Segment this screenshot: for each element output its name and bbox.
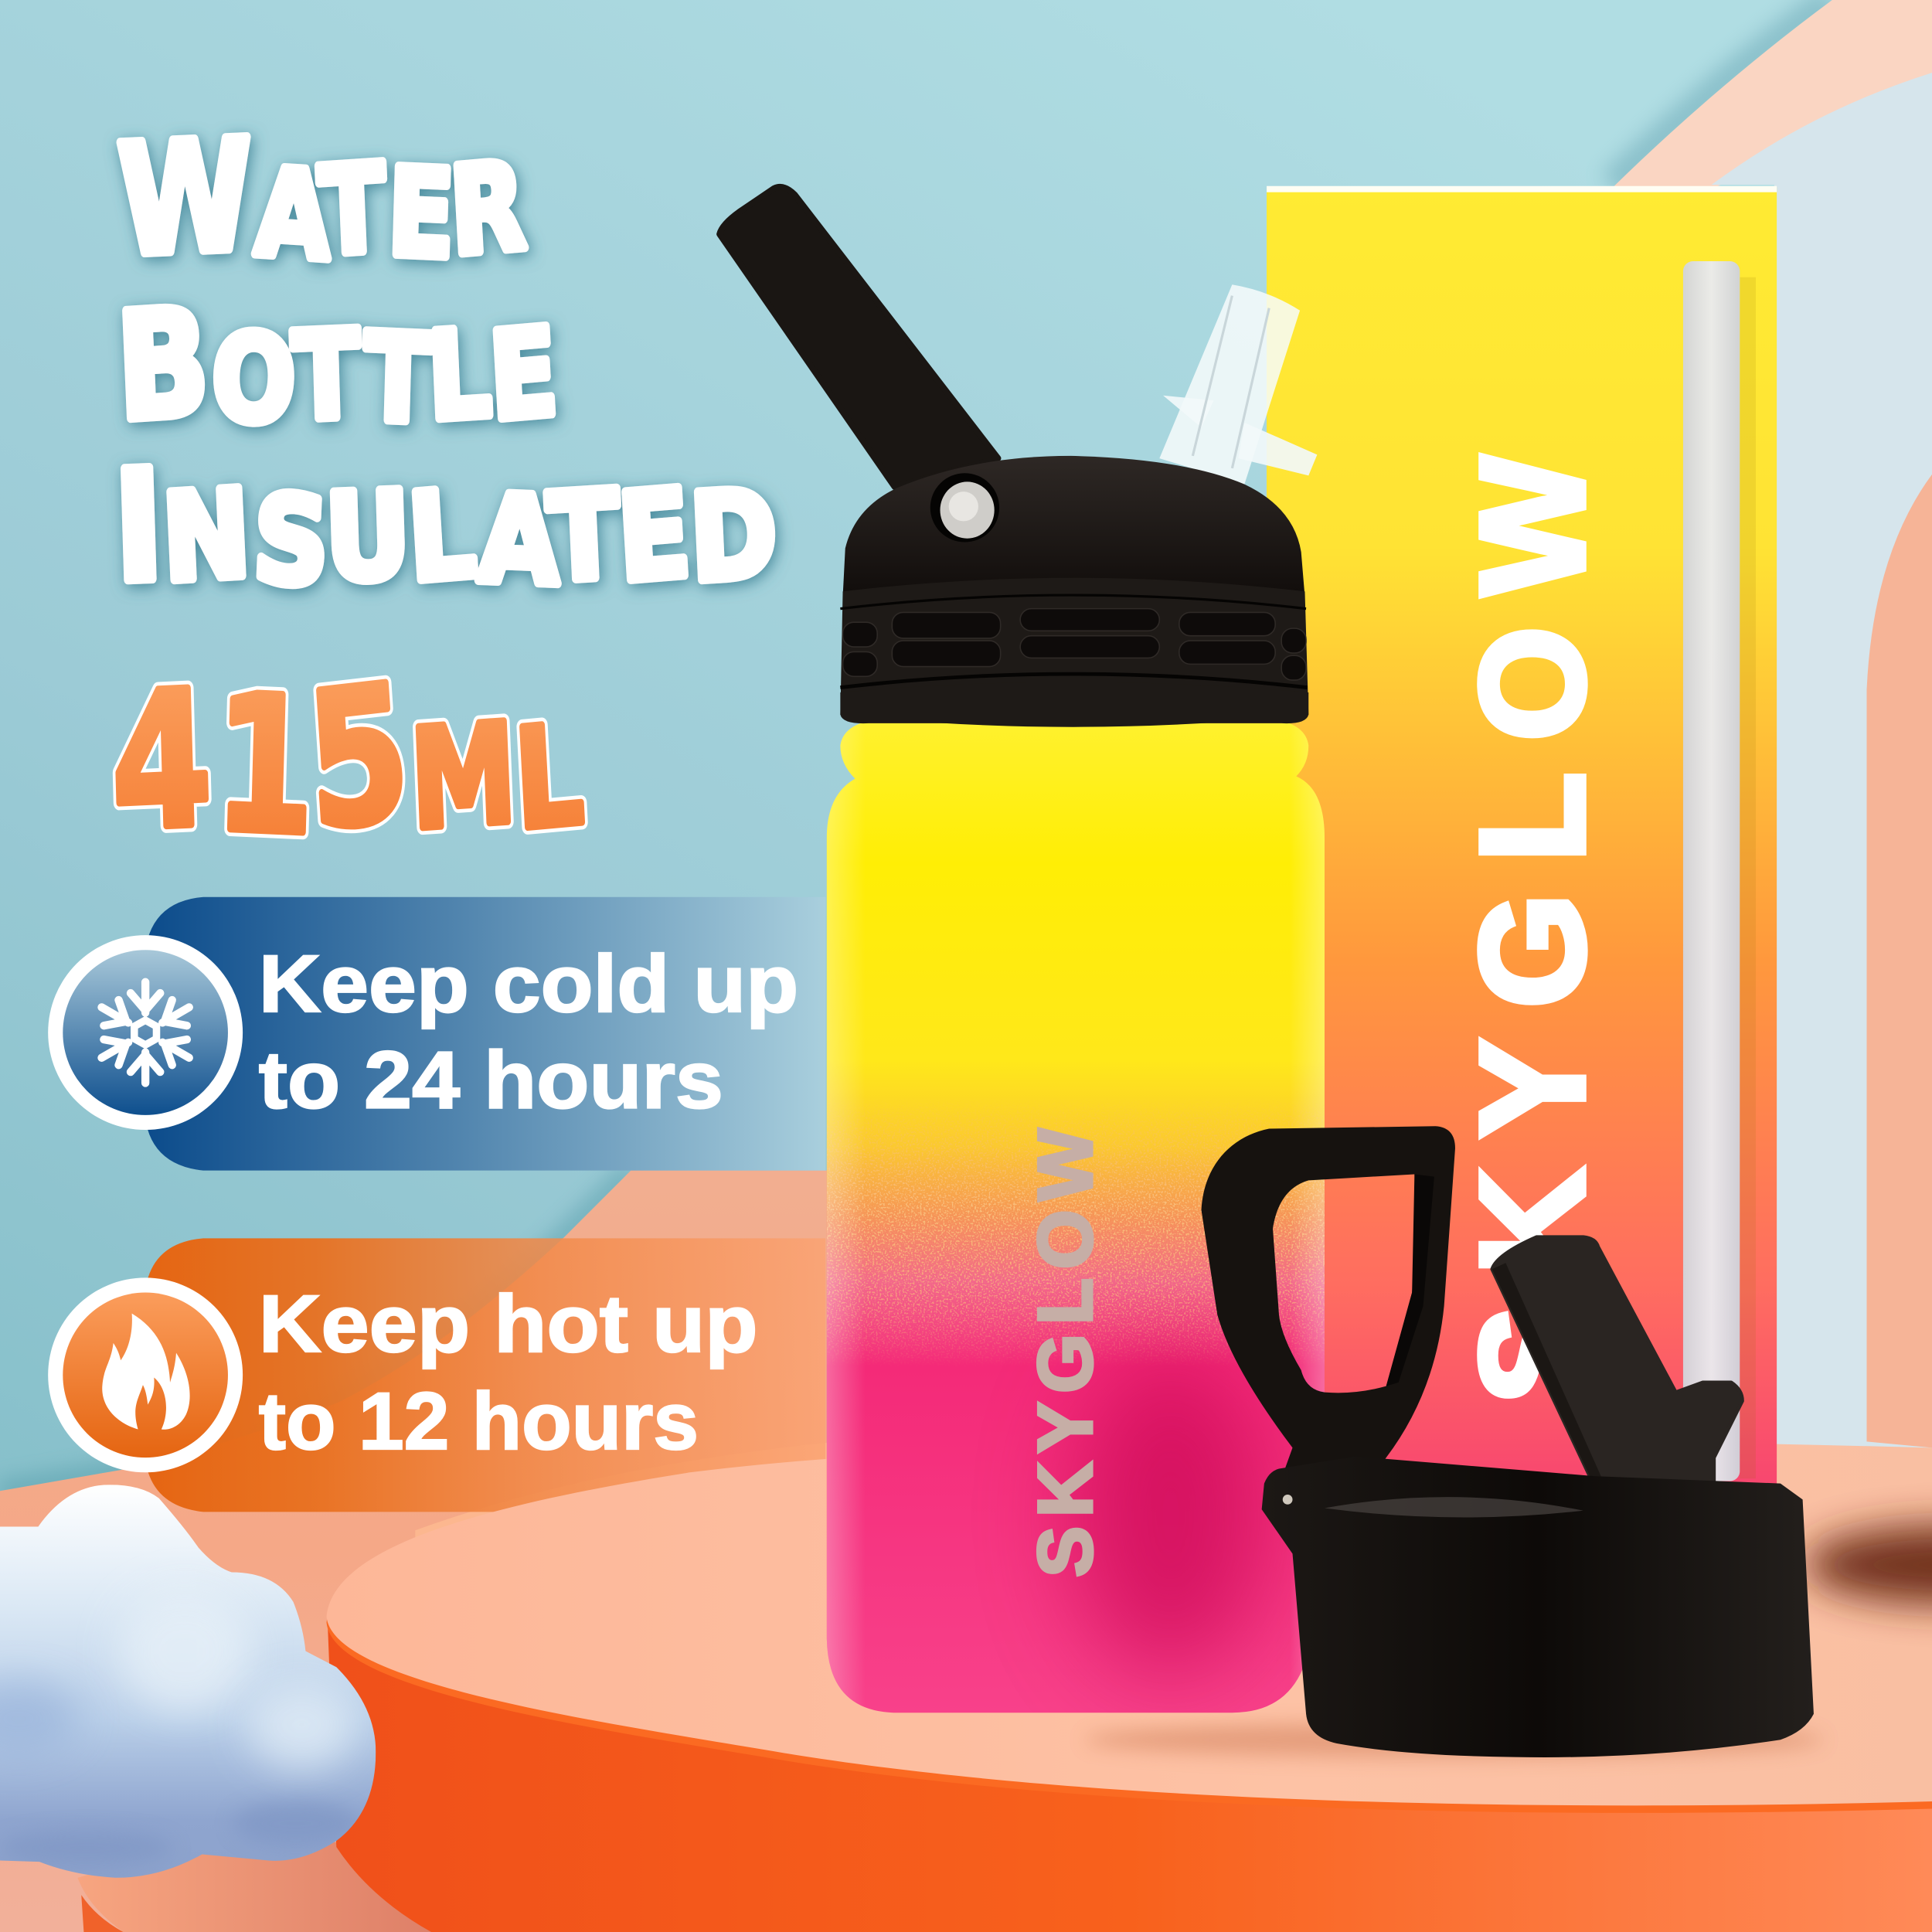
title line: Water: WATER bbox=[114, 107, 529, 290]
cloud bbox=[0, 1478, 382, 1885]
cap base bbox=[840, 682, 1308, 723]
bottle shading and speckle bbox=[825, 715, 1331, 1725]
box face bbox=[1267, 187, 1777, 1493]
lid handle bbox=[1202, 1126, 1455, 1485]
panel: keep hot bbox=[48, 1238, 825, 1512]
cap collar bbox=[840, 578, 1308, 727]
bottle logo: SKYGLOW bbox=[1023, 1128, 1108, 1577]
cap dome bbox=[843, 456, 1304, 597]
spare lid bbox=[1202, 1126, 1814, 1757]
bottle body bbox=[827, 721, 1325, 1713]
carry strap bbox=[719, 187, 998, 487]
background shape: top right peach bbox=[1613, 0, 1932, 187]
text: keep hot: to 12 hours bbox=[259, 1376, 699, 1467]
title bbox=[111, 107, 780, 617]
straw bbox=[1683, 261, 1740, 1481]
text: keep cold: Keep cold up bbox=[259, 939, 798, 1029]
title line: Insulated: INSULATED bbox=[111, 437, 780, 617]
background shape: right peach arch bbox=[1866, 474, 1932, 1447]
background shape: right pale blue panel bbox=[1712, 73, 1932, 1454]
text: keep hot: Keep hot up bbox=[259, 1279, 758, 1369]
lid top highlight bbox=[1325, 1497, 1583, 1518]
lid handle inner strip bbox=[1386, 1174, 1434, 1386]
icon: flame badge bbox=[48, 1277, 243, 1472]
capacity: 415ml: 415ML bbox=[107, 647, 587, 876]
lower tier top bbox=[77, 1842, 444, 1932]
panel: keep cold bbox=[48, 897, 825, 1171]
pill background: cold bbox=[145, 897, 825, 1171]
platform bbox=[77, 1440, 1932, 1932]
lid hinge pin bbox=[1283, 1495, 1293, 1505]
cap pin bbox=[930, 473, 999, 543]
platform top bbox=[327, 1440, 1932, 1805]
lid spout bbox=[1492, 1237, 1742, 1486]
collar grips bbox=[843, 609, 1306, 680]
product box bbox=[1267, 186, 1777, 1493]
background shape: lower left peach wave bbox=[0, 1171, 838, 1932]
platform side bbox=[328, 1627, 1932, 1932]
title line: Bottle: BOTTLE bbox=[112, 277, 561, 454]
straw shadow bbox=[1740, 277, 1756, 1478]
icon: snowflake badge bbox=[48, 935, 243, 1130]
lid body bbox=[1262, 1457, 1814, 1757]
clear straw spout bbox=[1159, 284, 1317, 485]
platform rim bbox=[327, 1447, 1932, 1813]
shadow beside lid bbox=[1805, 1526, 1932, 1604]
pill background: hot bbox=[145, 1238, 825, 1512]
text: keep cold: to 24 hours bbox=[259, 1035, 723, 1125]
shadow under products bbox=[1084, 1723, 1824, 1757]
capacity: 415ml: 415ML bbox=[107, 647, 587, 876]
lower tier side bbox=[81, 1895, 123, 1932]
box logo: SKYGLOW bbox=[1450, 456, 1615, 1405]
bottle bbox=[719, 187, 1331, 1725]
